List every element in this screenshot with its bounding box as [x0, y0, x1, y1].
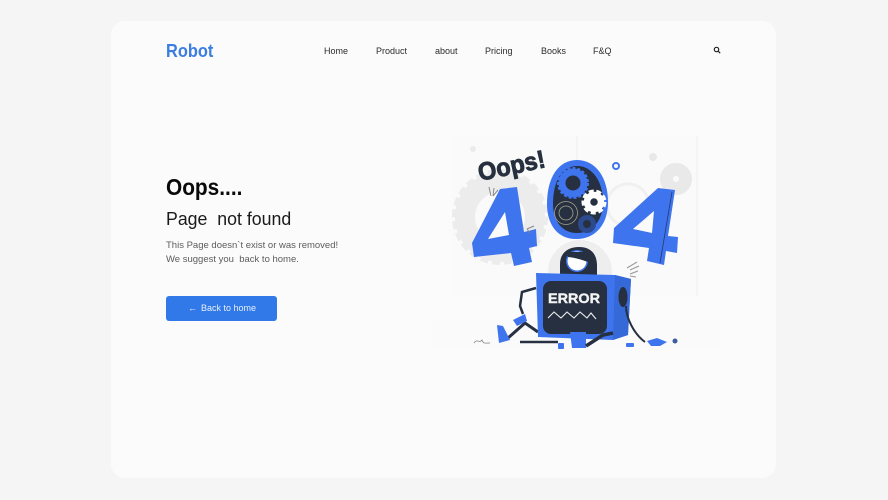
robot left leg: [497, 314, 538, 343]
gear: outline: [554, 202, 578, 224]
nav item: about: about: [435, 46, 458, 56]
button: Back to home: [166, 296, 277, 321]
subheading: Page not found: Page not found: [166, 209, 291, 229]
gear: blue: [558, 168, 588, 198]
nav item: Pricing: Pricing: [485, 46, 513, 56]
floor shadow line: [520, 341, 558, 343]
panel: page card: [111, 21, 776, 478]
illustration: 404 robot: [452, 136, 698, 349]
robot left arm: [520, 288, 536, 314]
icon: small ring: [613, 163, 619, 169]
button: Back to home: Back to home: [201, 303, 256, 313]
background gears: [454, 146, 686, 304]
navigation menu: [324, 46, 612, 56]
text block: description: This Page doesn`t exist or was removed! We suggest you back to home.: [166, 240, 338, 264]
robot head: [560, 247, 597, 276]
right arm cable: [626, 306, 645, 342]
icon: search: [714, 46, 721, 54]
right 4 edge line: [660, 192, 672, 263]
side port: [618, 287, 628, 307]
heading: Oops....: Oops....: [166, 174, 242, 200]
digit: right 4: [613, 188, 678, 265]
sprout on left 4: [489, 187, 534, 233]
plug stand: [570, 332, 586, 348]
robot screen: [543, 281, 607, 334]
digit: left 4: [472, 187, 537, 266]
screen wave: [548, 312, 596, 319]
robot hand sketch: [627, 262, 639, 277]
background frame: [432, 136, 720, 350]
gear: white: [583, 191, 605, 213]
robot body: [536, 273, 631, 340]
gear: dark blue: [580, 218, 594, 230]
robot right leg: [586, 333, 613, 346]
digit: blue 0 with gears: [547, 160, 608, 239]
text: ERROR: ERROR: [548, 290, 600, 306]
nav item: F&Q: F&Q: [593, 46, 612, 56]
floor debris: [474, 338, 678, 349]
nav item: Home: Home: [324, 46, 348, 56]
nav item: Books: Books: [541, 46, 566, 56]
robot eye: [566, 250, 588, 272]
text: Oops!: Oops!: [475, 145, 548, 187]
button: Back to home: ←: [188, 303, 197, 313]
robot: [497, 247, 645, 348]
logo: Robot: Robot: [166, 41, 213, 61]
nav item: Product: Product: [376, 46, 407, 56]
